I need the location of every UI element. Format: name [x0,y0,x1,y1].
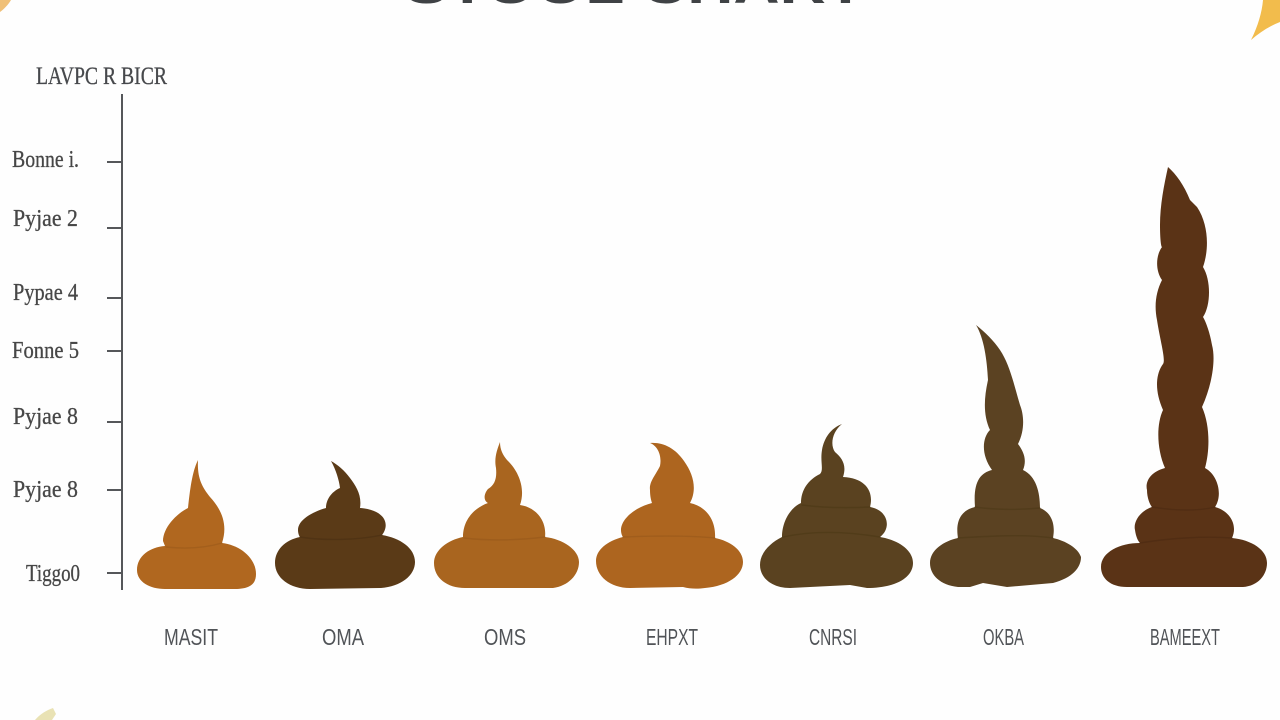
y axis labels: Bonne i. [12,147,79,173]
x axis labels: CNRSI [809,624,857,650]
corner decoration: top right leaf [1251,0,1280,40]
x axis labels: BAMEEXT [1150,624,1220,650]
x axis labels: EHPXT [646,624,698,650]
y axis with ticks [107,94,122,590]
x axis labels: OKBA [983,624,1024,650]
y axis labels: Tiggo0 [26,561,80,587]
y axis title: LAVPC R BICR [36,63,167,90]
stool 7 [1101,167,1267,587]
corner decoration: top left leaf [0,0,11,12]
y axis labels: Pyjae 8 [13,477,78,503]
x axis labels [164,624,1220,650]
stool 2 [275,461,415,589]
x axis labels: OMA [322,624,365,650]
y axis labels: Pyjae 8 [13,404,78,430]
stool 4 [596,443,743,589]
stool 6 [930,325,1081,587]
stool 3 [434,442,579,588]
y axis labels: Pyjae 2 [13,206,78,232]
x axis labels: MASIT [164,624,218,650]
y axis labels: Fonne 5 [12,338,79,364]
y axis labels: Pypae 4 [13,280,78,306]
corner decoration: bottom left leaf [35,708,56,720]
stool 5 [760,424,913,588]
y axis labels [12,147,80,587]
x axis labels: OMS [484,624,526,650]
stool 1 [137,460,256,589]
